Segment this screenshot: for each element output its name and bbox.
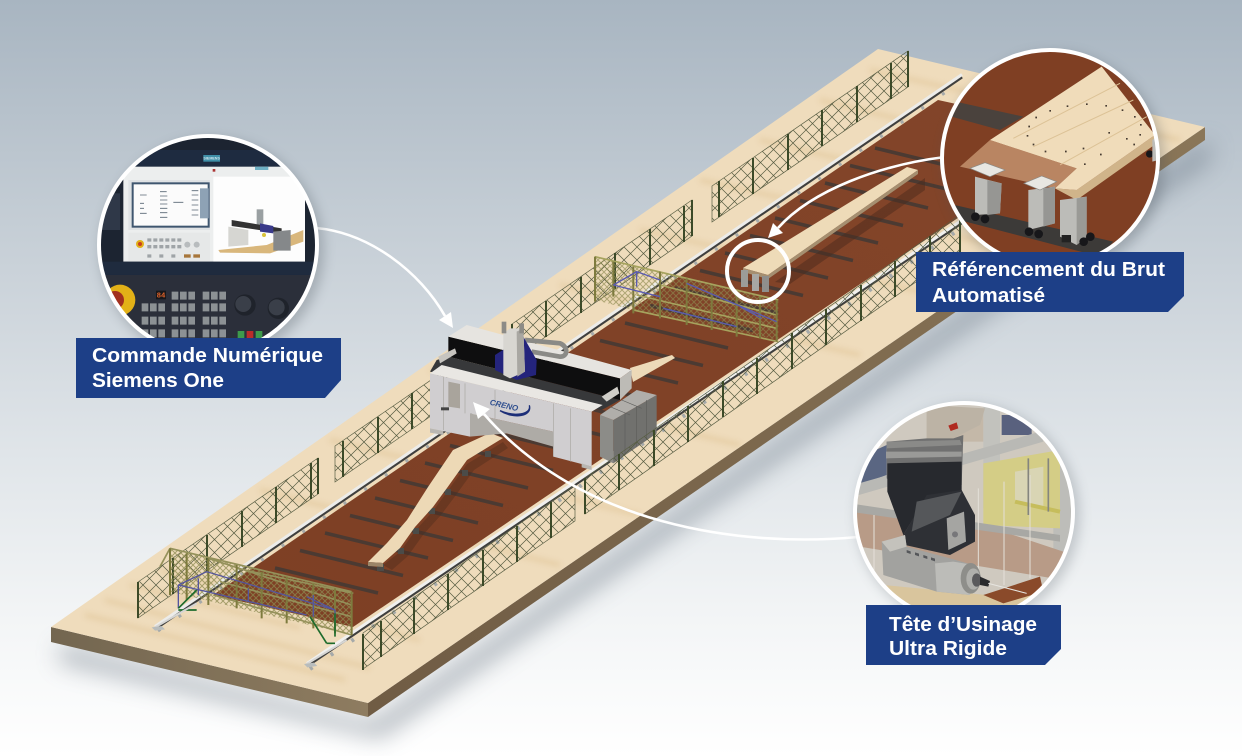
control console photo bbox=[101, 138, 315, 338]
cable loop bbox=[525, 340, 566, 357]
long wood blank with supports bbox=[741, 167, 925, 292]
front beam face bbox=[430, 373, 592, 467]
near rail bbox=[307, 204, 985, 669]
callout arrow to blank reference bbox=[768, 157, 945, 238]
callout arrow to gantry from control bbox=[316, 228, 453, 328]
panel: automated blank referencing bbox=[937, 48, 1170, 252]
upper safety gantry bbox=[595, 257, 778, 342]
machine logo bbox=[489, 398, 530, 416]
near side fence bbox=[363, 215, 960, 670]
wood plank bbox=[990, 67, 1157, 200]
wood blank in front of the machine bbox=[368, 433, 508, 571]
label: blank referencing: Automatisé bbox=[932, 285, 1045, 307]
siemens badge: SIEMENS bbox=[203, 157, 220, 161]
highlight ring on blank reference bbox=[727, 240, 789, 302]
head housing bbox=[886, 405, 985, 555]
label: machining head: Ultra Rigide bbox=[889, 638, 1007, 660]
spindle motor bbox=[882, 535, 1027, 595]
callout arrow to gantry from head bbox=[473, 402, 858, 539]
far rail bbox=[155, 74, 962, 631]
emergency stop bbox=[110, 284, 136, 314]
panel: machining head bbox=[851, 400, 1085, 605]
spindle head detail bbox=[857, 405, 1071, 605]
label: numeric control: Commande Numérique bbox=[92, 345, 323, 367]
on-screen machine preview bbox=[218, 209, 303, 253]
translucent plank end bbox=[960, 140, 1077, 188]
gantry machine bbox=[430, 322, 657, 470]
label: numeric control: Siemens One bbox=[92, 370, 224, 392]
brown machine floor bbox=[213, 100, 1085, 627]
front beam top bbox=[430, 365, 603, 412]
label: blank referencing: Référencement du Brut bbox=[932, 259, 1165, 281]
ram column bbox=[502, 322, 525, 378]
on-screen table bbox=[133, 183, 209, 227]
blue ram carriage bbox=[495, 337, 537, 380]
electrical cabinet bbox=[600, 390, 657, 463]
knobs bbox=[234, 294, 289, 319]
label: machining head: Tête d’Usinage bbox=[889, 614, 1037, 636]
lower safety gantry bbox=[152, 548, 353, 667]
portal interior bbox=[470, 413, 553, 447]
support columns bbox=[970, 163, 1087, 245]
siemens badge bbox=[203, 155, 220, 162]
label: numeric control bbox=[76, 338, 341, 398]
keypad bbox=[142, 292, 226, 337]
label: blank referencing bbox=[916, 252, 1184, 312]
casters bbox=[971, 150, 1153, 246]
rear beam bbox=[430, 325, 632, 410]
panel: numeric control bbox=[96, 134, 328, 338]
digital display: 84 bbox=[157, 293, 166, 301]
floor slots bbox=[275, 148, 978, 593]
machine logo: CRENO bbox=[489, 398, 520, 413]
wood blank behind the machine bbox=[630, 355, 675, 382]
label: machining head bbox=[866, 605, 1061, 665]
yellow assembly bbox=[983, 450, 1060, 528]
plank on supports detail bbox=[944, 52, 1156, 252]
far side fence bbox=[138, 51, 908, 618]
